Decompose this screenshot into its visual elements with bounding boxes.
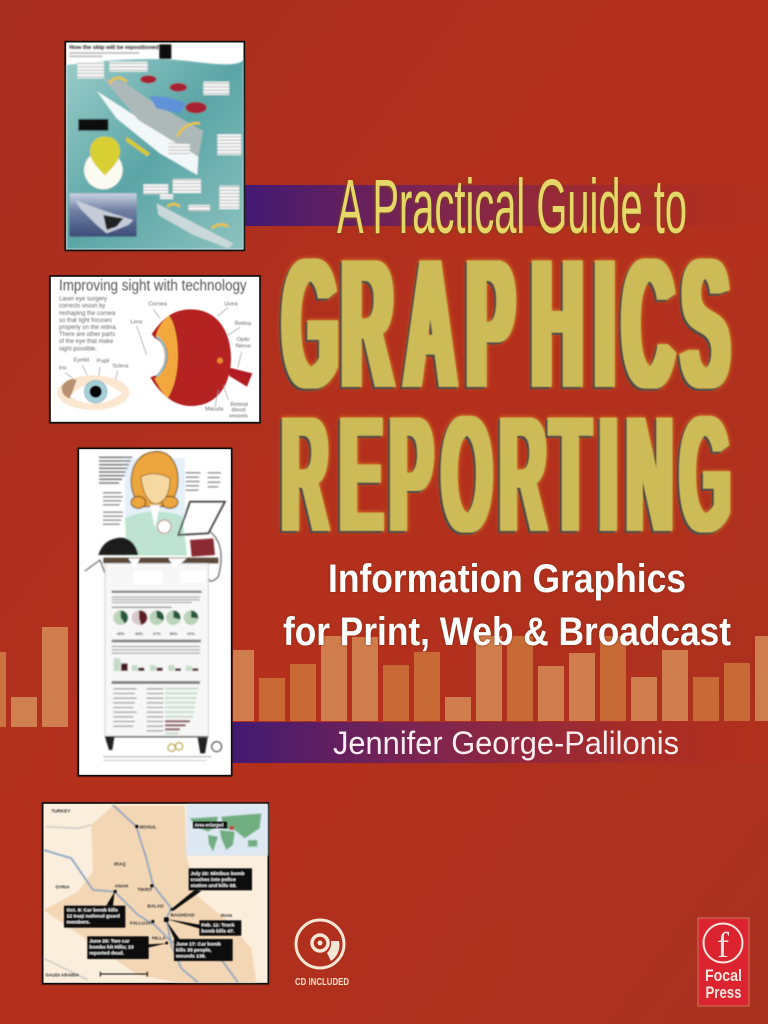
eye labels: Sclera	[112, 363, 129, 369]
eye labels: Retinal	[230, 402, 248, 408]
map place labels: IRAN	[221, 913, 233, 918]
horizontal bar chart	[165, 688, 198, 734]
map callouts: July 26: Minibus bomb	[191, 871, 244, 877]
CD label: CD INCLUDED	[295, 976, 349, 988]
map callouts: Area enlarged	[195, 823, 224, 828]
woman	[126, 512, 187, 555]
map callouts	[64, 822, 252, 961]
callouts	[77, 62, 241, 211]
map callouts: reported dead.	[89, 950, 125, 956]
eye labels: Iris	[59, 365, 67, 371]
Iraq land	[44, 806, 256, 982]
eye labels: Retina	[235, 321, 252, 327]
subheading lines	[69, 52, 139, 54]
black callout	[78, 119, 108, 131]
map callouts: Feb. 11: Truck	[201, 922, 235, 928]
eye labels: Macula	[205, 407, 224, 413]
map callouts: June 17: Car bomb	[176, 942, 221, 948]
panel: survey graphic with woman	[78, 448, 232, 776]
column chart	[114, 658, 198, 671]
notes	[128, 558, 206, 584]
map place labels: TIKRIT	[137, 887, 152, 892]
scale bar	[100, 972, 147, 977]
map place labels: SYRIA	[55, 884, 70, 889]
map callouts: bombs hit Hilla; 23	[89, 944, 134, 950]
eye labels: Uvea	[224, 301, 238, 307]
map place labels: ANAH	[115, 884, 129, 889]
title: GRAPHICS: GRAPHICS	[283, 222, 729, 427]
yellow pontoon	[126, 137, 150, 157]
section text lines	[112, 597, 200, 654]
icon: CD included	[295, 920, 349, 988]
eye labels: Eyelid	[74, 357, 89, 363]
panel: Iraq map	[43, 803, 268, 984]
map place labels: BAGHDAD	[171, 913, 195, 918]
eye cross section	[150, 309, 252, 406]
eye intro text: properly on the retina.	[59, 325, 118, 331]
yellow arrows	[109, 78, 228, 228]
map callouts: Oct. 8: Car bomb kills	[67, 908, 118, 914]
eye intro text: so that light focuses	[59, 318, 112, 324]
eye labels	[59, 301, 252, 420]
borders	[44, 825, 91, 980]
desk legs	[105, 737, 208, 753]
map callouts: crashes into police	[191, 877, 236, 883]
eye labels: blood	[232, 408, 246, 414]
eye intro text: sight possible.	[59, 346, 97, 352]
map place labels: SAUDI ARABIA	[45, 972, 80, 977]
pie values: 31%	[187, 631, 195, 636]
lifeboats	[140, 75, 207, 113]
section bars	[112, 591, 202, 684]
map callouts: kills 35 people,	[176, 948, 212, 954]
map markers and leaders	[106, 825, 201, 948]
map place labels	[45, 808, 233, 977]
book	[190, 538, 215, 557]
map place labels: FALLUJA	[130, 921, 152, 926]
logo: Focal Press	[698, 918, 749, 1006]
bar chart motif	[0, 627, 768, 727]
eye labels: Nerve	[236, 344, 251, 350]
desk top	[103, 558, 218, 563]
pie values: 37%	[153, 631, 161, 636]
intro text lines	[99, 457, 221, 525]
eye intro text: reshaping the cornea	[59, 311, 116, 317]
blue cargo	[150, 96, 186, 113]
author purple band	[232, 722, 768, 763]
ship hull	[97, 91, 198, 175]
map callouts: bomb kills 47.	[201, 928, 235, 934]
glasses and mouse	[168, 742, 222, 752]
map place labels: HILLA	[152, 936, 166, 941]
map place labels: BALAD	[147, 904, 164, 909]
logo: Focal Press: Press	[706, 983, 742, 1002]
photo	[69, 193, 137, 237]
chart labels lines	[113, 688, 163, 731]
computer	[178, 502, 225, 535]
logo: Focal Press: f	[717, 925, 729, 965]
eye labels: Cornea	[148, 301, 168, 307]
top purple band	[245, 185, 768, 226]
inset world map	[186, 804, 268, 856]
eye intro text	[59, 297, 118, 352]
eye labels: Pupil	[97, 359, 109, 365]
map callouts: June 26: Two car	[89, 938, 129, 944]
pie values: 45%	[135, 631, 143, 636]
eye heading: Improving sight with technology	[59, 278, 247, 295]
eye intro text: Laser eye surgery	[59, 297, 107, 303]
panel: eye graphic	[50, 276, 260, 423]
backdrop	[125, 458, 185, 522]
sea background	[67, 58, 243, 249]
map place labels: TURKEY	[51, 808, 71, 813]
logo: Focal Press: Focal	[705, 966, 742, 985]
eye labels: Lens	[130, 319, 143, 325]
eye label lines	[65, 307, 242, 407]
front view eye	[57, 375, 129, 410]
pie charts	[113, 610, 198, 625]
eye intro text: There are other parts	[59, 332, 115, 338]
cord	[85, 560, 105, 573]
ship heading: How the ship will be repositioned	[69, 45, 159, 51]
lower ship	[157, 203, 233, 248]
map callouts: 12 Iraqi national guard	[67, 914, 120, 920]
map callouts: members.	[67, 920, 91, 926]
eye intro text: corrects vision by	[59, 304, 105, 310]
map place labels: IRAQ	[114, 862, 126, 867]
eye intro text: of the eye that make	[59, 339, 114, 345]
pie values: 46%	[117, 631, 125, 636]
subtitle line 1: Information Graphics	[328, 557, 686, 601]
author name: Jennifer George-Palilonis	[333, 725, 679, 761]
desk	[105, 563, 208, 737]
black label	[159, 44, 171, 59]
map callouts: station and kills 68.	[191, 883, 237, 889]
pie values: 36%	[169, 631, 178, 636]
eye labels: Optic	[237, 337, 250, 343]
footer lines	[103, 756, 212, 757]
pie values	[117, 631, 195, 636]
panel: ship graphic	[65, 42, 244, 250]
telephone	[98, 538, 138, 555]
title: REPORTING: REPORTING	[282, 382, 730, 567]
eye labels: vessels	[229, 414, 248, 420]
balloon inset	[84, 151, 123, 189]
rivers	[44, 805, 238, 982]
map callouts: wounds 138.	[175, 954, 207, 960]
map place labels: MOSUL	[140, 824, 157, 829]
